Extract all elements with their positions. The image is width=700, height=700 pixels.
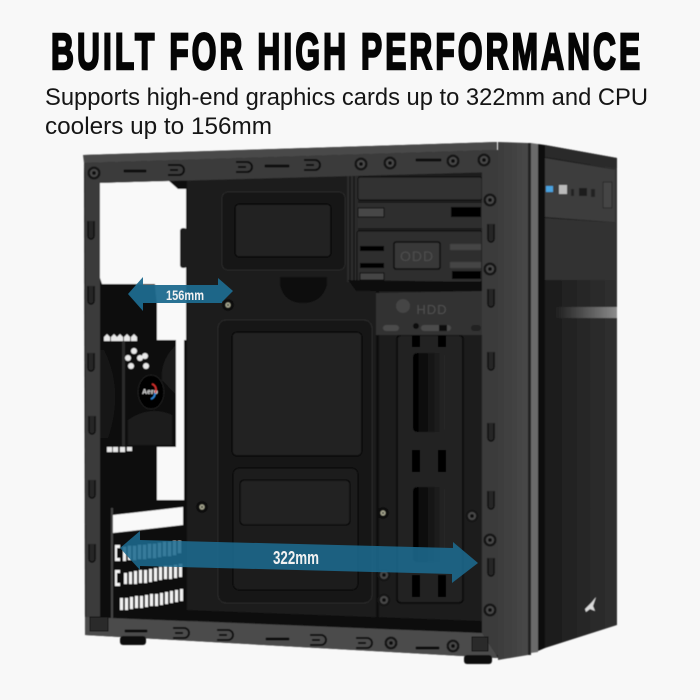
PSU emboss bbox=[222, 192, 345, 270]
case interior bbox=[84, 142, 498, 658]
ODD label: ODD bbox=[400, 248, 434, 264]
left frame rail bbox=[85, 163, 100, 635]
arrow: 322mm graphics card clearance bbox=[120, 531, 478, 583]
cable handle bbox=[280, 277, 327, 303]
case feet bbox=[120, 636, 492, 664]
front logo bbox=[585, 597, 596, 612]
HDD plate: HDD bbox=[416, 302, 448, 317]
main chassis plate bbox=[187, 172, 497, 632]
title: BUILT FOR HIGH PERFORMANCE bbox=[51, 23, 640, 80]
white cutout lower bbox=[157, 303, 186, 502]
white cutout upper bbox=[100, 181, 186, 303]
bottom rail bbox=[85, 617, 498, 658]
screws and hooks bbox=[88, 154, 496, 652]
front panel bbox=[545, 145, 617, 648]
computer case bbox=[83, 142, 617, 664]
vent holes bbox=[104, 334, 149, 452]
fan logo: Aero bbox=[142, 389, 158, 396]
arrow: 322mm graphics card clearance: 322mm bbox=[273, 548, 319, 568]
subtitle: Supports high-end graphics cards up to 322mm and CPU bbox=[45, 84, 648, 111]
drive bays bbox=[347, 176, 482, 292]
right tray with slots bbox=[397, 335, 463, 603]
front shine bbox=[555, 307, 617, 318]
top rail bbox=[83, 142, 497, 183]
arrow: 156mm CPU cooler clearance: 156mm bbox=[166, 287, 204, 303]
front side panel bbox=[498, 142, 545, 660]
right frame rail bbox=[482, 150, 498, 655]
rear fan bbox=[100, 334, 176, 452]
subtitle: coolers up to 156mm bbox=[45, 113, 272, 140]
expansion slots bbox=[100, 500, 190, 625]
arrow: 156mm CPU cooler clearance bbox=[128, 277, 233, 311]
motherboard tray emboss bbox=[218, 320, 372, 603]
rear opening bbox=[100, 180, 187, 510]
HDD plate bbox=[376, 291, 482, 335]
front I/O bbox=[546, 182, 612, 208]
